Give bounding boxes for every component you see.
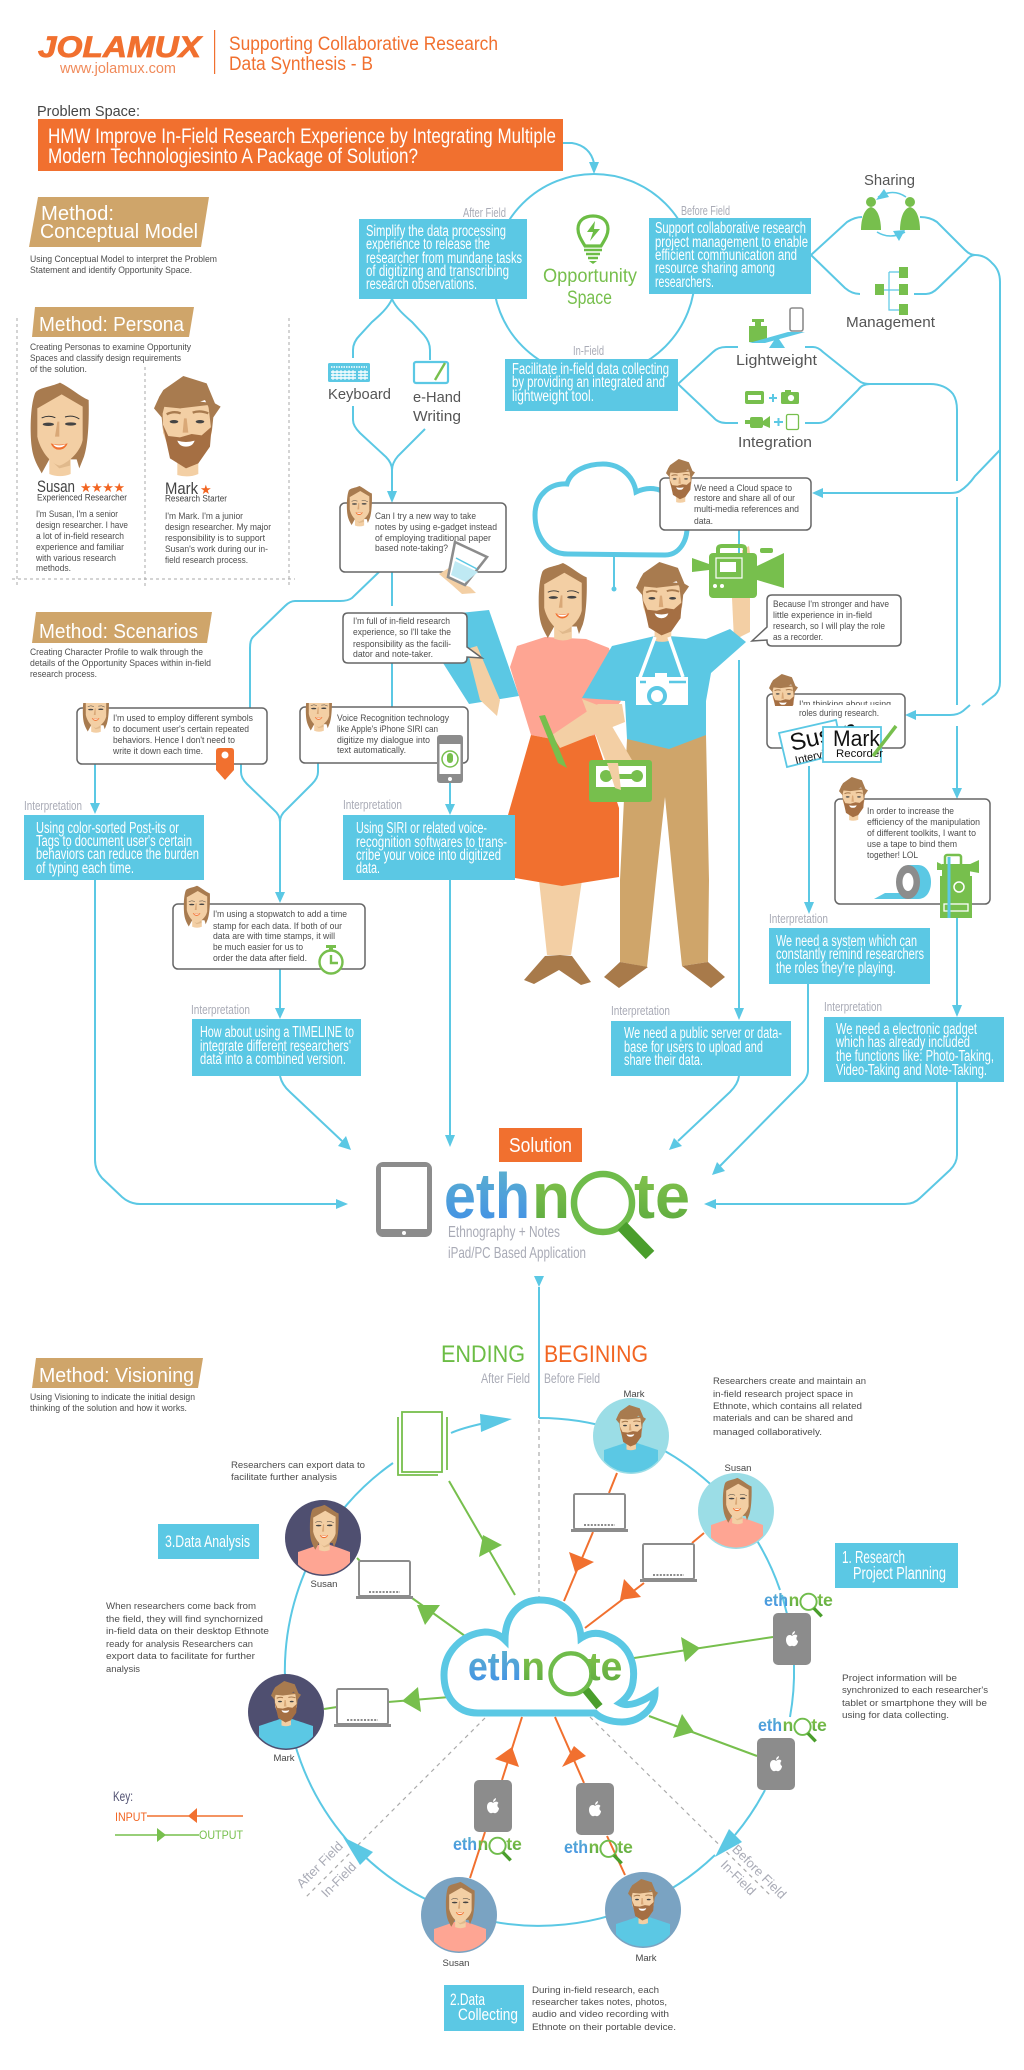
icon: balance with weight and phone: [749, 308, 805, 348]
interpretation: SIRI: recognition softwares to trans-: [356, 834, 507, 851]
central cloud with ethnote logo: [444, 1600, 655, 1722]
label: e-hand writing: e-Hand: [413, 389, 461, 406]
logo: JOLAMUX: [38, 31, 203, 77]
logo: ethnote in cloud: [468, 1645, 622, 1707]
interpretation: tags: Using color-sorted Post-its or: [36, 820, 179, 837]
avatar: Mark collecting: [605, 1872, 681, 1950]
interpretation: public server: Interpretation: [611, 1004, 670, 1018]
avatar name labels: Mark: [273, 1753, 295, 1764]
text: data analysis description: When researchers come back from: [106, 1601, 256, 1612]
callout: Mark wants cloud space: restore and share all of our: [694, 493, 795, 504]
legend: key: INPUT: [115, 1810, 148, 1824]
feature: management: Management: [846, 314, 936, 331]
callout: Susan voice recognition: [299, 703, 469, 783]
panel: problem statement: [38, 119, 563, 171]
text: planning description: Ethnote, which contains all related: [713, 1401, 862, 1412]
callout: Susan asks about e-gadget: of employing traditional paper: [375, 533, 491, 544]
label: opportunity space: Opportunity: [543, 266, 637, 287]
heading: method scenarios: [32, 612, 212, 643]
text: ethnote tagline: Ethnography + Notes: [448, 1224, 560, 1241]
text: data analysis description: analysis: [106, 1664, 140, 1675]
icon: Mark name tag: Recorder: [836, 748, 883, 760]
callout: Mark recorder: little experience in in-field: [773, 610, 872, 621]
icon: taped camera combo: [937, 855, 979, 918]
labels: field transitions: After Field: [293, 1838, 346, 1891]
text: planning description: in-field research project space in: [713, 1389, 853, 1400]
label: e-hand writing: Writing: [413, 408, 461, 425]
text: scenarios description: research process.: [30, 669, 97, 680]
heading: method conceptual model: [29, 197, 209, 247]
feature: integration: Integration: [738, 434, 812, 451]
avatar: Susan analysis: [285, 1500, 361, 1578]
logo: small ethnote bottom left: [453, 1834, 522, 1860]
text: export note: [231, 1460, 365, 1483]
callout: Susan symbols: to document user's certain repeated: [113, 724, 249, 735]
heading: method persona: [32, 307, 194, 337]
interpretation: SIRI: cribe your voice into digitized: [356, 847, 501, 864]
arms and pen: [539, 699, 632, 790]
callout: Mark roles with name tags: I'm thinking about using: [799, 699, 891, 710]
logo: small ethnote bottom left: n: [478, 1834, 488, 1854]
labels: field transitions: In-Field: [718, 1857, 759, 1898]
bio: Susan: [35, 509, 128, 574]
Mark body: [582, 562, 750, 988]
avatar name labels: Mark: [623, 1389, 645, 1400]
panel: after field goal: research observations.: [366, 276, 477, 293]
panel: before field goal: researchers.: [655, 274, 714, 291]
problem space label: Problem Space:: [37, 103, 140, 120]
text: persona description: Creating Personas to examine Opportunity: [30, 342, 191, 353]
step: data collecting: 2.Data: [450, 1991, 486, 2009]
callout: Susan voice recognition: text automatically.: [337, 745, 406, 756]
text: sync description: synchronized to each researcher's: [842, 1685, 988, 1696]
feature: lightweight: Lightweight: [736, 352, 818, 369]
Susan body: [467, 563, 621, 985]
text: data collecting description: During in-field research, each: [532, 1985, 659, 1996]
logo: JOLAMUX: www.jolamux.com: [59, 61, 176, 77]
callout: Susan asks about e-gadget: [340, 486, 506, 594]
callout: Mark roles with name tags: [767, 674, 905, 767]
logo: small ethnote right: te: [811, 1715, 827, 1735]
interpretation: public server: [611, 1004, 791, 1076]
logo: ethnote in cloud: eth: [468, 1645, 521, 1689]
callout: Mark tape toolkits: efficiency of the manipulation: [867, 817, 980, 828]
callout: Susan symbols: I'm used to employ different symbols: [113, 713, 253, 724]
icon: blue notebook: [443, 610, 519, 704]
icon: Mark portrait: [154, 376, 221, 476]
interpretation: tags: of typing each time.: [36, 860, 134, 877]
text: data collecting description: audio and video recording with: [532, 2009, 669, 2020]
callout: Mark roles with name tags: roles during research.: [799, 708, 879, 719]
heading: method scenarios: Method: Scenarios: [39, 621, 198, 643]
callout: Mark recorder: [752, 595, 901, 646]
logo: ethnote: n: [532, 1160, 570, 1232]
logo: small ethnote bottom right: eth: [564, 1837, 588, 1857]
callout: Mark recorder: as a recorder.: [773, 632, 823, 643]
text: scenarios description: Creating Character Profile to walk through the: [30, 647, 203, 658]
label: after field: After Field: [463, 206, 506, 220]
bio: Susan: design researcher. I have: [36, 520, 128, 531]
logo: small ethnote bottom left: eth: [453, 1834, 477, 1854]
bio: Mark: I'm Mark. I'm a junior: [165, 511, 243, 522]
panel: in-field goal: [505, 359, 678, 411]
callout: Susan facilitator: responsibility as the facili-: [353, 639, 451, 650]
callout: Susan facilitator: I'm full of in-field research: [353, 616, 450, 627]
icon: tape roll: [874, 865, 931, 899]
icon: Susan portrait: [31, 383, 89, 476]
avatar name labels: Susan: [725, 1463, 751, 1474]
bio: Susan: I'm Susan, I'm a senior: [36, 509, 118, 520]
logo: ethnote: [444, 1160, 690, 1255]
heading: solution: Solution: [509, 1135, 572, 1157]
panel: before field goal: Support collaborative research: [655, 220, 806, 237]
heading: method persona: Method: Persona: [39, 314, 185, 336]
text: data analysis description: in-field data on their desktop Ethnote: [106, 1626, 269, 1637]
avatar name labels: Susan: [311, 1579, 337, 1590]
callout: Susan asks about e-gadget: based note-taking?: [375, 543, 448, 554]
callout: Susan asks about e-gadget: notes by using e-gadget instead: [375, 522, 497, 533]
callout: Mark wants cloud space: [660, 459, 811, 530]
interpretation: electronic gadget: [824, 1000, 1004, 1082]
logo: small ethnote bottom right: te: [617, 1837, 633, 1857]
interpretation: tags: behaviors can reduce the burden: [36, 846, 199, 863]
icon: video camera raised: [692, 546, 784, 598]
text: data collecting description: Ethnote on their portable device.: [532, 2022, 676, 2033]
text: scenarios description: details of the Opportunity Spaces within in-field: [30, 658, 211, 669]
text: persona description: of the solution.: [30, 364, 87, 375]
icon: cassette tape: [589, 760, 652, 802]
icon: light bulb: [578, 216, 608, 264]
interpretation: role system: constantly remind researchers: [776, 946, 924, 963]
bio: Mark: Susan's work during our in-: [165, 544, 268, 555]
panel: before field goal: resource sharing among: [655, 260, 775, 277]
text: persona description: Spaces and classify design requirements: [30, 353, 181, 364]
feature: sharing: Sharing: [864, 172, 915, 189]
text: planning description: managed collaboratively.: [713, 1427, 822, 1438]
heading: solution: [499, 1128, 582, 1162]
text: visioning description: Using Visioning to indicate the initial design: [30, 1392, 195, 1403]
legend: key: OUTPUT: [199, 1828, 244, 1842]
avatar name labels: Mark: [635, 1953, 657, 1964]
callout: Susan symbols: [76, 703, 268, 780]
interpretation: tags: [24, 799, 204, 880]
callout: Susan voice recognition: like Apple's iPhone SIRI can: [337, 724, 438, 735]
text: planning description: materials and can be shared and: [713, 1413, 853, 1424]
callout: Susan stopwatch: data are with time stamps, it will: [213, 931, 335, 942]
interpretation: public server: base for users to upload and: [624, 1039, 763, 1056]
step: data analysis: [158, 1524, 259, 1559]
legend: key: [113, 1788, 244, 1842]
text: scenarios description: [30, 647, 211, 680]
callout: Susan stopwatch: be much easier for us to: [213, 942, 303, 953]
callout: Mark wants cloud space: We need a Cloud space to: [694, 483, 792, 494]
logo: small ethnote right top: eth: [764, 1590, 788, 1610]
labels: field transitions: [293, 1838, 789, 1902]
icon: phone with microphone: [437, 735, 463, 783]
avatar: Mark planning: [593, 1398, 669, 1476]
title: Data Synthesis - B: [229, 54, 373, 75]
text: export note: facilitate further analysis: [231, 1472, 337, 1483]
callout: Susan facilitator: experience, so I'll take the: [353, 627, 451, 638]
heading: ending and beginning: ENDING: [441, 1341, 525, 1368]
logo: ethnote: te: [634, 1160, 690, 1232]
text: export note: Researchers can export data to: [231, 1460, 365, 1471]
text: conceptual model description: [30, 254, 217, 276]
icon: camera on chest: [636, 637, 688, 705]
persona: Susan: [31, 383, 128, 574]
callout: Mark tape toolkits: In order to increase the: [867, 806, 954, 817]
panel: before field goal: project management to enable: [655, 234, 808, 251]
text: visioning description: [30, 1392, 195, 1414]
labels: field transitions: In-Field: [318, 1859, 359, 1900]
text: data analysis description: export data to facilitate for further: [106, 1651, 255, 1662]
interpretation: role system: [769, 912, 930, 984]
feature: integration: [738, 390, 812, 451]
devices: laptops: [334, 1494, 697, 1727]
panel: in-field goal: lightweight tool.: [512, 388, 594, 405]
step: research project planning: Project Planning: [853, 1563, 946, 1583]
icon: e-hand writing tablet: [414, 362, 448, 383]
bio: Mark: field research process.: [165, 555, 248, 566]
heading: ending and beginning: [441, 1341, 648, 1386]
avatar name labels: [273, 1389, 751, 1969]
callout: Mark recorder: research, so I will play the role: [773, 621, 885, 632]
icon: Mark name tag: Mark: [833, 726, 881, 751]
name: Susan: Susan: [37, 477, 75, 496]
rating: four stars: ★★★★: [80, 480, 125, 495]
legend: key: Key:: [113, 1788, 133, 1804]
icon: two people sharing: [861, 189, 920, 241]
arrows: input and output to cloud: [324, 1473, 773, 1878]
panel: before field goal: [649, 218, 811, 294]
text: sync description: using for data collecting.: [842, 1710, 949, 1721]
logo: small ethnote bottom right: [564, 1837, 633, 1863]
bio: Mark: [165, 511, 271, 566]
step: data analysis: 3.Data Analysis: [165, 1532, 250, 1551]
panel: after field goal: of digitizing and transcribing: [366, 263, 509, 280]
panel: problem statement: HMW Improve In-Field Research Experience by Integrating Multiple: [48, 124, 556, 148]
icon: cassette plus camera: [745, 390, 799, 404]
interpretation: timeline: [191, 1003, 361, 1076]
feature: management: [846, 267, 936, 331]
avatar: Susan planning: [698, 1473, 774, 1551]
text: conceptual model description: Using Conceptual Model to interpret the Problem: [30, 254, 217, 265]
callout: Susan asks about e-gadget: Can I try a new way to take: [375, 511, 476, 522]
text: sync description: Project information will be: [842, 1673, 957, 1684]
callout: Susan stopwatch: [173, 886, 365, 974]
panel: after field goal: [359, 219, 527, 299]
feature: sharing: [861, 172, 920, 241]
heading: ending and beginning: Before Field: [544, 1371, 600, 1386]
panel: after field goal: Simplify the data processing: [366, 223, 506, 240]
interpretation: electronic gadget: Interpretation: [824, 1000, 882, 1014]
panel: in-field goal: by providing an integrated and: [512, 374, 665, 391]
label: e-hand writing: [413, 389, 461, 425]
persona: Mark: [154, 376, 271, 566]
interpretation: SIRI: Using SIRI or related voice-: [356, 820, 487, 837]
step: research project planning: [835, 1543, 958, 1588]
illustration: Susan and Mark figures: [443, 546, 784, 988]
feature: lightweight: [736, 308, 818, 369]
icon: tree diagram: [875, 267, 908, 315]
logo: small ethnote right top: [764, 1590, 833, 1616]
logo: small ethnote bottom right: n: [589, 1837, 599, 1857]
flow lines: into solution: [95, 880, 957, 1418]
role: research starter: Research Starter: [165, 494, 227, 504]
text: ethnote tagline: [448, 1224, 586, 1262]
panel: problem statement: Modern Technologiesinto A Package of Solution?: [48, 144, 418, 168]
logo: small ethnote right top: te: [817, 1590, 833, 1610]
callout: Susan symbols: behaviors. Hence I don't need to: [113, 735, 235, 746]
interpretation: timeline: Interpretation: [191, 1003, 250, 1017]
panel: before field goal: efficient communication and: [655, 247, 797, 264]
text: visioning description: thinking of the solution and how it works.: [30, 1403, 187, 1414]
avatar: Mark analysis: [248, 1674, 324, 1752]
icon: cloud: [535, 464, 687, 592]
logo: small ethnote right top: n: [789, 1590, 799, 1610]
icon: Mark name tag: [823, 726, 896, 762]
callout: Mark wants cloud space: multi-media references and: [694, 504, 799, 515]
callout: Susan voice recognition: digitize my dialogue into: [337, 735, 430, 746]
label: keyboard: Keyboard: [328, 386, 391, 403]
devices: tablets: [474, 1613, 811, 1835]
callout: Susan symbols: write it down each time.: [112, 746, 203, 757]
text: planning description: [713, 1376, 866, 1438]
avatar name labels: Susan: [443, 1958, 469, 1969]
heading: method visioning: Method: Visioning: [39, 1365, 194, 1387]
text: data collecting description: [532, 1985, 676, 2033]
panel: in-field goal: Facilitate in-field data collecting: [512, 361, 669, 378]
callout: Susan voice recognition: Voice Recognition technology: [337, 713, 449, 724]
heading: method visioning: [32, 1358, 203, 1388]
icon: tablet held in hands: [439, 542, 487, 594]
icon: Susan name tag: Interviewer: [794, 743, 849, 767]
interpretation: tags: Tags to document user's certain: [36, 833, 192, 850]
interpretation: timeline: How about using a TIMELINE to: [200, 1024, 354, 1041]
heading: ending and beginning: After Field: [481, 1371, 530, 1386]
arrow: problem to opportunity: [563, 143, 599, 174]
interpretation: SIRI: Interpretation: [343, 798, 402, 812]
icon: tablet: [376, 1162, 432, 1237]
text: sync description: [842, 1673, 988, 1721]
callout: Mark tape toolkits: of different toolkits, I want to: [867, 828, 976, 839]
label: in-field: In-Field: [573, 344, 604, 358]
interpretation: SIRI: [343, 798, 515, 880]
heading: ending and beginning: BEGINING: [544, 1341, 648, 1368]
icon: Susan name tag: Susan: [787, 715, 860, 757]
bio: Susan: methods.: [36, 563, 71, 574]
label: before field: Before Field: [681, 204, 730, 218]
interpretation: timeline: data into a combined version.: [200, 1051, 346, 1068]
labels: field transitions: Before Field: [729, 1842, 789, 1902]
divider: header: [214, 30, 215, 74]
callout: Mark wants cloud space: data.: [694, 516, 713, 527]
callout: Susan stopwatch: order the data after field.: [213, 953, 307, 964]
flow lines: upper diagram: [90, 174, 1000, 1020]
title: [229, 34, 498, 75]
bio: Susan: with various research: [35, 553, 116, 564]
step: research project planning: 1. Research: [842, 1547, 905, 1567]
text: conceptual model description: Statement and identify Opportunity Space.: [30, 265, 192, 276]
logo: ethnote in cloud: te: [588, 1645, 622, 1689]
icon: exported documents: [398, 1412, 447, 1475]
title: Supporting Collaborative Research: [229, 34, 498, 55]
icon: stopwatch: [320, 945, 342, 974]
logo: JOLAMUX: JOLAMUX: [38, 31, 203, 64]
rating: one star: ★: [200, 482, 212, 497]
callout: Susan stopwatch: stamp for each data. If both of our: [213, 921, 342, 932]
step: data collecting: Collecting: [458, 2006, 518, 2024]
interpretation: role system: Interpretation: [769, 912, 828, 926]
text: ethnote tagline: iPad/PC Based Application: [448, 1245, 586, 1262]
avatar: Susan collecting: [421, 1877, 497, 1955]
callout: Mark tape toolkits: [835, 777, 990, 918]
icon: orange tag: [216, 748, 234, 780]
text: sync description: tablet or smartphone they will be: [842, 1698, 987, 1709]
interpretation: tags: Interpretation: [24, 799, 82, 813]
bio: Susan: experience and familiar: [36, 542, 124, 553]
interpretation: SIRI: data.: [356, 860, 380, 877]
interpretation: role system: the roles they're playing.: [776, 960, 896, 977]
text: persona description: [30, 342, 191, 375]
callout: Mark tape toolkits: use a tape to bind them: [867, 839, 957, 850]
heading: method conceptual model: Method:: [41, 203, 114, 225]
text: data analysis description: ready for analysis Researchers can: [106, 1639, 253, 1650]
bio: Mark: design researcher. My major: [165, 522, 271, 533]
logo: small ethnote right: eth: [758, 1715, 782, 1735]
cycle ring with arrows: [285, 1414, 794, 1926]
interpretation: timeline: integrate different researchers': [200, 1038, 351, 1055]
interpretation: electronic gadget: which has already included: [835, 1034, 970, 1051]
panel: after field goal: researcher from mundane tasks: [366, 250, 522, 267]
interpretation: public server: share their data.: [624, 1052, 703, 1069]
label: opportunity space: [543, 266, 637, 309]
icon: video camera plus tablet: [745, 414, 798, 430]
logo: small ethnote bottom left: te: [506, 1834, 522, 1854]
interpretation: public server: We need a public server or data-: [624, 1025, 782, 1042]
logo: ethnote in cloud: n: [521, 1645, 545, 1689]
callout: Susan facilitator: dator and note-taker.: [353, 649, 433, 660]
panel: after field goal: experience to release the: [366, 236, 490, 253]
interpretation: role system: We need a system which can: [776, 933, 917, 950]
callout: Susan stopwatch: I'm using a stopwatch to add a time: [213, 909, 347, 920]
role: experienced researcher: Experienced Researcher: [37, 492, 127, 502]
logo: small ethnote right: n: [783, 1715, 793, 1735]
text: data collecting description: researcher takes notes, photos,: [532, 1997, 667, 2008]
logo: ethnote: eth: [444, 1160, 530, 1232]
bio: Susan: a lot of in-field research: [36, 531, 124, 542]
callout: Mark recorder: Because I'm stronger and have: [773, 599, 889, 610]
text: data analysis description: [106, 1601, 269, 1675]
logo: small ethnote right: [758, 1715, 827, 1741]
label: opportunity space: Space: [567, 288, 612, 309]
text: planning description: Researchers create and maintain an: [713, 1376, 866, 1387]
heading: method conceptual model: Conceptual Model: [40, 221, 198, 243]
bio: Mark: responsibility is to support: [165, 533, 265, 544]
callout: Susan facilitator: [343, 613, 482, 663]
name: Mark: Mark: [165, 479, 198, 498]
icon: keyboard: [328, 363, 370, 382]
text: data analysis description: the field, they will find synchornized: [106, 1614, 263, 1625]
callout: Mark tape toolkits: together! LOL: [867, 850, 918, 861]
step: data collecting: [444, 1985, 524, 2031]
